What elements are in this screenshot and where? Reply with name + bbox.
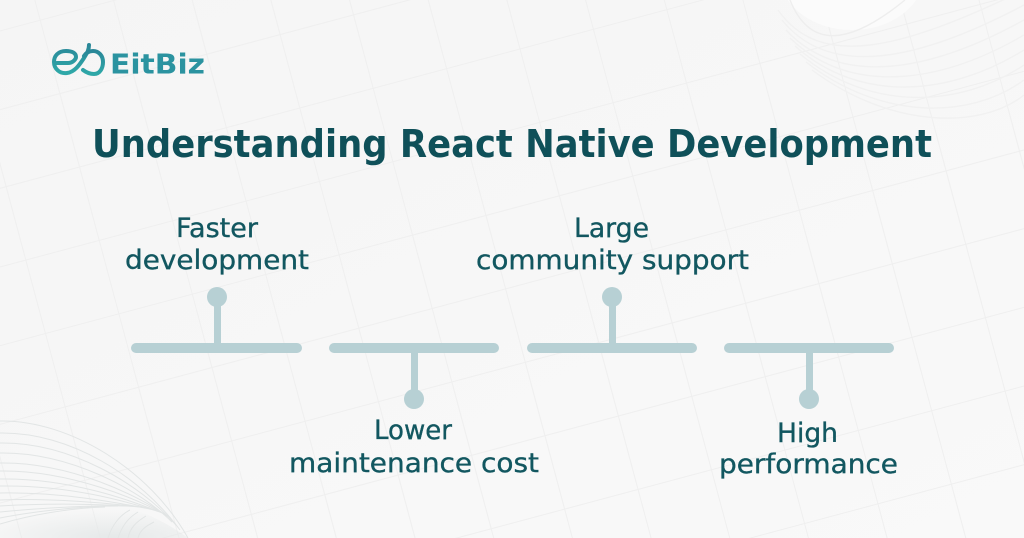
logo wordmark: EitBiz [110, 48, 205, 80]
item: Large community support [476, 213, 749, 353]
logo icon [54, 45, 103, 74]
label: Large [574, 213, 649, 244]
item: Faster development [125, 213, 309, 353]
connector marker [131, 287, 302, 353]
connector marker [527, 287, 697, 353]
logo [54, 45, 205, 80]
label: performance [719, 449, 898, 480]
title: Understanding React Native Development [92, 122, 932, 166]
label [289, 415, 539, 479]
label [476, 213, 749, 276]
item: High performance [719, 343, 898, 480]
label: community support [476, 245, 749, 276]
label: development [125, 245, 309, 276]
label: Lower [374, 415, 453, 446]
connector marker [724, 343, 894, 409]
label [125, 213, 309, 276]
connector marker [329, 343, 499, 409]
label: High [777, 418, 838, 449]
item: Lower maintenance cost [289, 343, 539, 479]
decoration: bottom-left contour curves [0, 421, 188, 538]
decoration: top-right contour curves [778, 0, 1024, 118]
label: Faster [176, 213, 259, 244]
label [719, 418, 898, 480]
label: maintenance cost [289, 448, 539, 479]
